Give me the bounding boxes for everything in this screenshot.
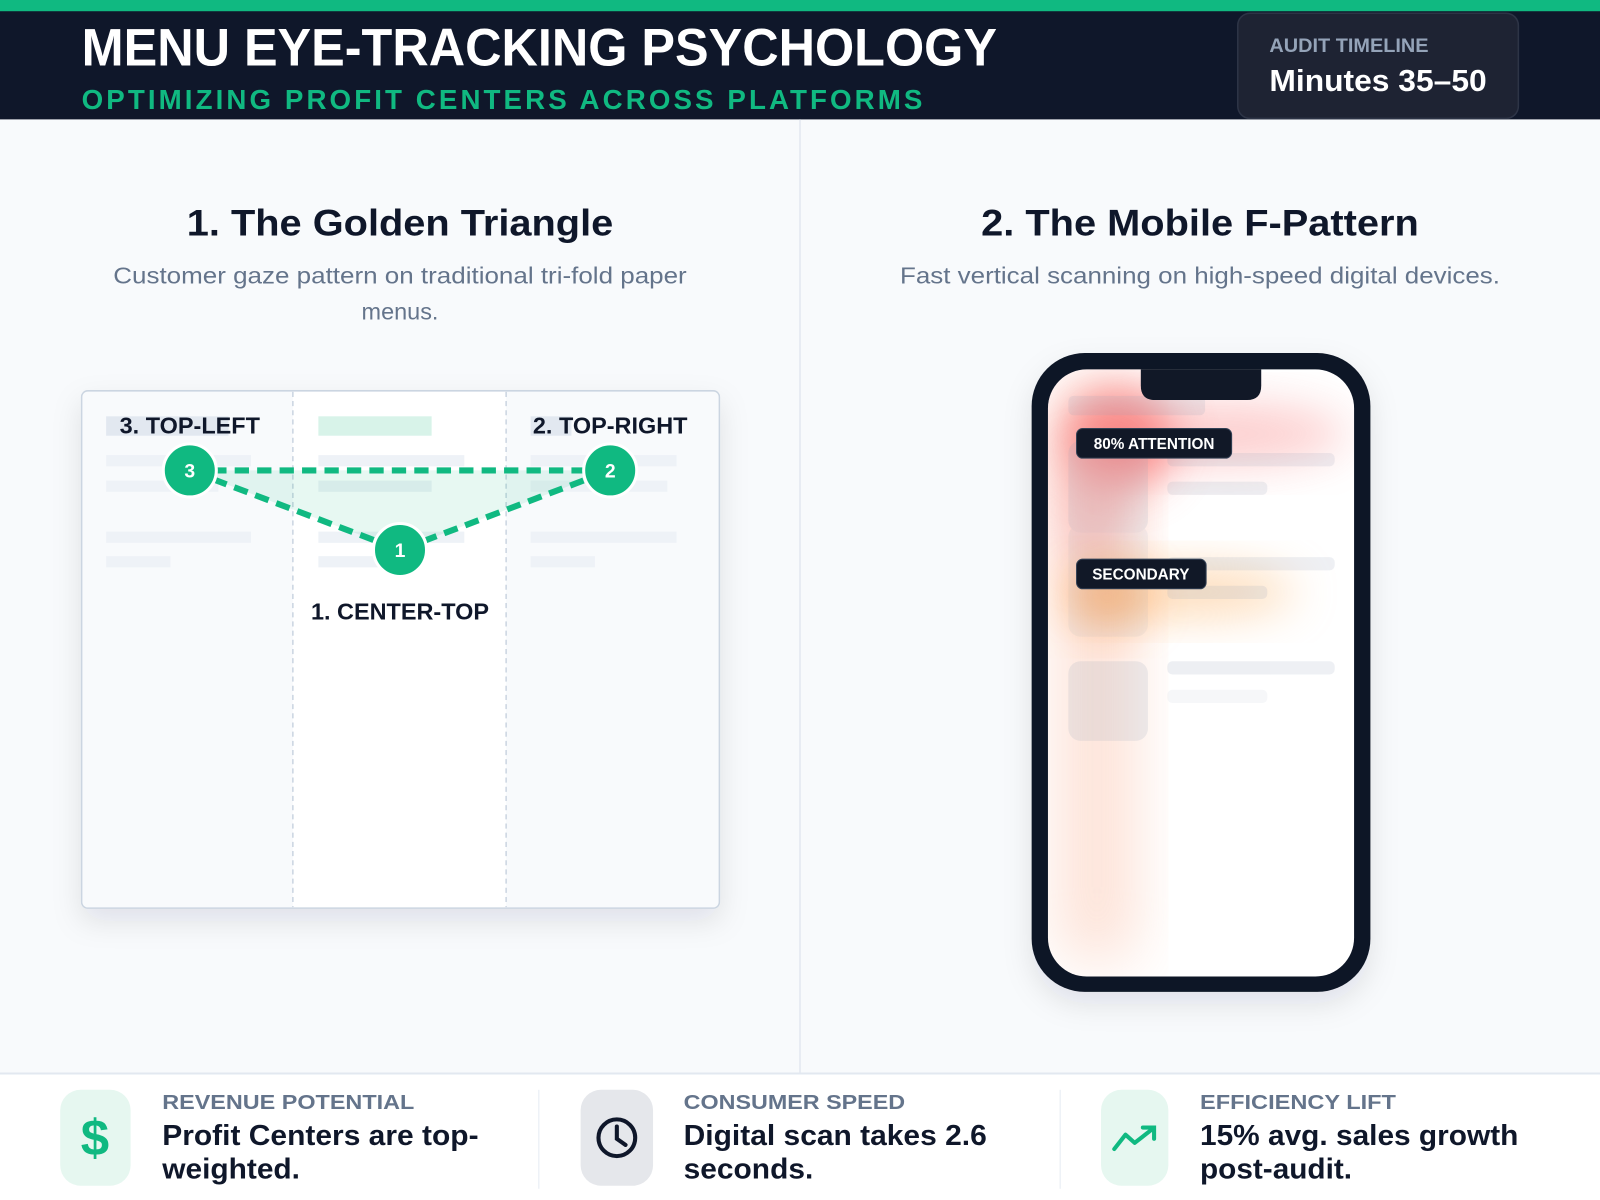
tag: 80% attention: 80% ATTENTION <box>1094 436 1214 453</box>
stat: revenue potential <box>60 1090 479 1186</box>
heading: mobile f-pattern: 2. The Mobile F-Pattern <box>981 203 1419 244</box>
subtitle: OPTIMIZING PROFIT CENTERS ACROSS PLATFORMS <box>82 84 926 115</box>
node 1 <box>373 523 427 577</box>
stat: consumer speed: CONSUMER SPEED <box>684 1092 905 1114</box>
stat: efficiency lift: EFFICIENCY LIFT <box>1200 1092 1397 1114</box>
heatmap <box>1056 388 1347 959</box>
stat: efficiency lift: post-audit. <box>1200 1154 1352 1186</box>
audit timeline badge: Minutes 35–50 <box>1269 64 1487 98</box>
node 2: 2 <box>605 461 616 483</box>
icon: trend up <box>1101 1090 1168 1186</box>
node 3 <box>163 444 216 497</box>
label: top-right: 2. TOP-RIGHT <box>533 413 688 439</box>
description: golden triangle: Customer gaze pattern on traditional tri-fold paper <box>113 263 687 289</box>
icon: dollar: $ <box>81 1109 109 1166</box>
stat: consumer speed: seconds. <box>684 1154 813 1186</box>
label: top-left: 3. TOP-LEFT <box>120 413 261 439</box>
tag: 80% attention <box>1077 429 1232 458</box>
footer stats bar <box>0 1073 1600 1200</box>
header <box>0 0 1600 119</box>
audit timeline badge <box>1238 13 1518 118</box>
description: golden triangle: menus. <box>362 298 438 324</box>
notch <box>1141 369 1261 400</box>
triangle path <box>190 470 610 550</box>
tri-fold menu diagram <box>82 391 719 908</box>
stat: efficiency lift <box>1101 1090 1518 1186</box>
node 1: 1 <box>395 540 406 562</box>
tag: secondary: SECONDARY <box>1092 567 1189 584</box>
heading: golden triangle: 1. The Golden Triangle <box>187 203 613 244</box>
description: mobile f-pattern: Fast vertical scanning on high-speed digital devices. <box>900 263 1500 289</box>
stat: efficiency lift: 15% avg. sales growth <box>1200 1120 1518 1152</box>
stat: consumer speed: Digital scan takes 2.6 <box>684 1120 987 1152</box>
stat: revenue potential: Profit Centers are top- <box>162 1120 479 1152</box>
node 2 <box>584 444 637 497</box>
stat: revenue potential: REVENUE POTENTIAL <box>162 1092 414 1114</box>
stat: revenue potential: weighted. <box>161 1154 300 1186</box>
node 3: 3 <box>184 461 195 483</box>
icon: clock <box>581 1090 653 1186</box>
title: MENU EYE-TRACKING PSYCHOLOGY <box>82 18 997 77</box>
phone mockup <box>1032 353 1370 992</box>
stat: consumer speed <box>581 1090 987 1186</box>
panel: mobile f-pattern <box>900 203 1500 992</box>
tag: secondary <box>1077 559 1206 589</box>
panel: golden triangle <box>82 203 719 908</box>
label: center-top: 1. CENTER-TOP <box>311 598 489 624</box>
audit timeline badge: AUDIT TIMELINE <box>1269 35 1429 57</box>
icon: dollar <box>60 1090 131 1186</box>
description: golden triangle <box>113 263 687 324</box>
